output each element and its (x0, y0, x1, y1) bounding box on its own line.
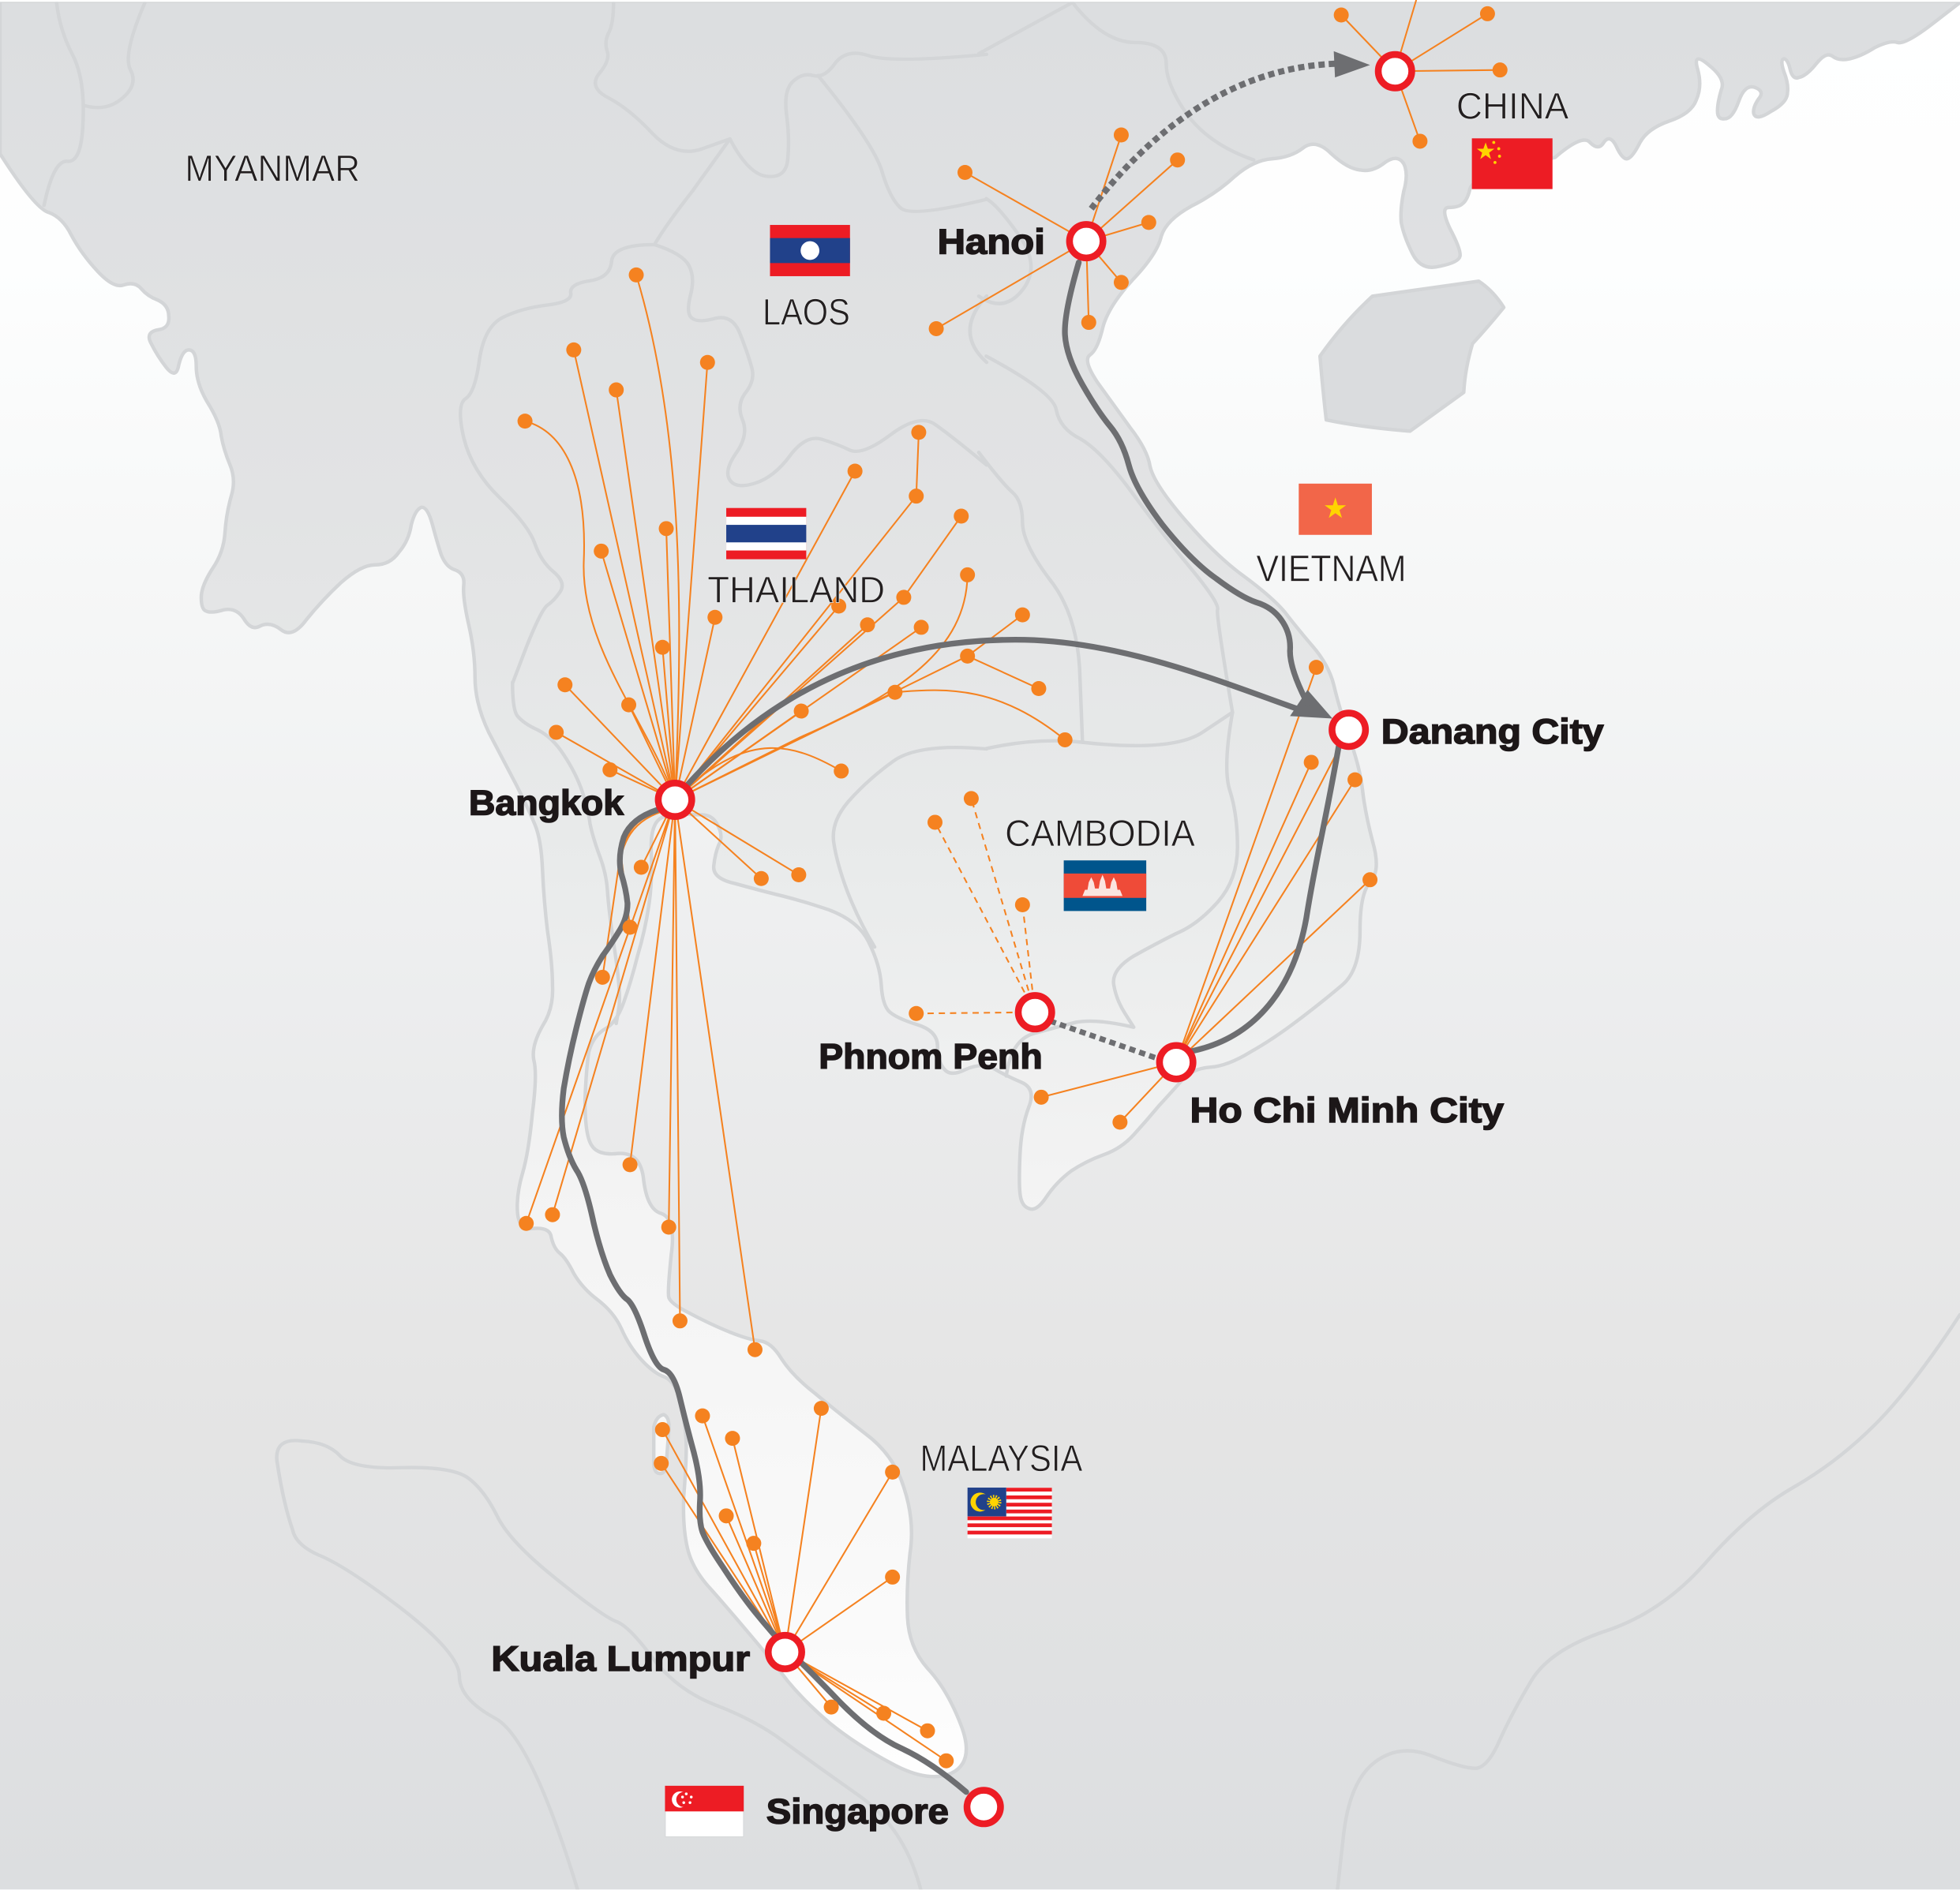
country borders west (44, 3, 987, 947)
grey route: Danang to Ho Chi Minh City (1193, 746, 1339, 1051)
orange destination dots (518, 6, 1508, 1769)
country label: Laos: LAOS (763, 292, 850, 334)
country label: Thailand: THAILAND (707, 569, 885, 611)
orange links from Hanoi, China hub, Ho Chi Minh City and Kuala Lumpur (661, 0, 1500, 1761)
flag: Laos (770, 225, 850, 276)
city label: Danang City: Danang City (1381, 713, 1604, 751)
Hainan island (1320, 281, 1504, 431)
Borneo outline (1337, 1315, 1960, 1889)
country label: Malaysia: MALAYSIA (920, 1438, 1083, 1480)
city label: Phnom Penh: Phnom Penh (819, 1038, 1043, 1076)
Sumatra outline (277, 1440, 922, 1894)
flag: Vietnam (1299, 484, 1372, 535)
country borders east and south (512, 2, 1254, 1076)
city label: Kuala Lumpur: Kuala Lumpur (491, 1640, 750, 1679)
city label: Singapore: Singapore (766, 1792, 949, 1831)
city hub markers (658, 54, 1411, 1824)
dashed orange links from Phnom Penh (916, 799, 1035, 1013)
flag: Malaysia (968, 1488, 1052, 1538)
flag: Cambodia (1064, 860, 1146, 911)
small islands off Malaysia (654, 1415, 669, 1473)
grey route: Bangkok to Danang with arrow (688, 640, 1332, 784)
city label: Bangkok: Bangkok (469, 784, 624, 822)
city label: Hanoi: Hanoi (938, 223, 1045, 261)
grey route: Bangkok to Kuala Lumpur to Singapore (562, 810, 966, 1792)
grey route: Hanoi to Danang (1065, 263, 1307, 704)
dotted route: Hanoi to China with arrow (1091, 51, 1370, 208)
dotted route: Phnom Penh to Ho Chi Minh City (1050, 1021, 1157, 1058)
flag: Thailand (726, 508, 806, 560)
flag: China (1472, 138, 1553, 189)
country label: Cambodia: CAMBODIA (1005, 813, 1195, 855)
country label: China: CHINA (1456, 85, 1569, 127)
flag: Singapore (665, 1786, 744, 1836)
orange links from Bangkok (525, 275, 1065, 1349)
country label: Vietnam: VIETNAM (1256, 548, 1406, 590)
country label: Myanmar: MYANMAR (185, 148, 360, 190)
city label: Ho Chi Minh City: Ho Chi Minh City (1190, 1091, 1504, 1130)
